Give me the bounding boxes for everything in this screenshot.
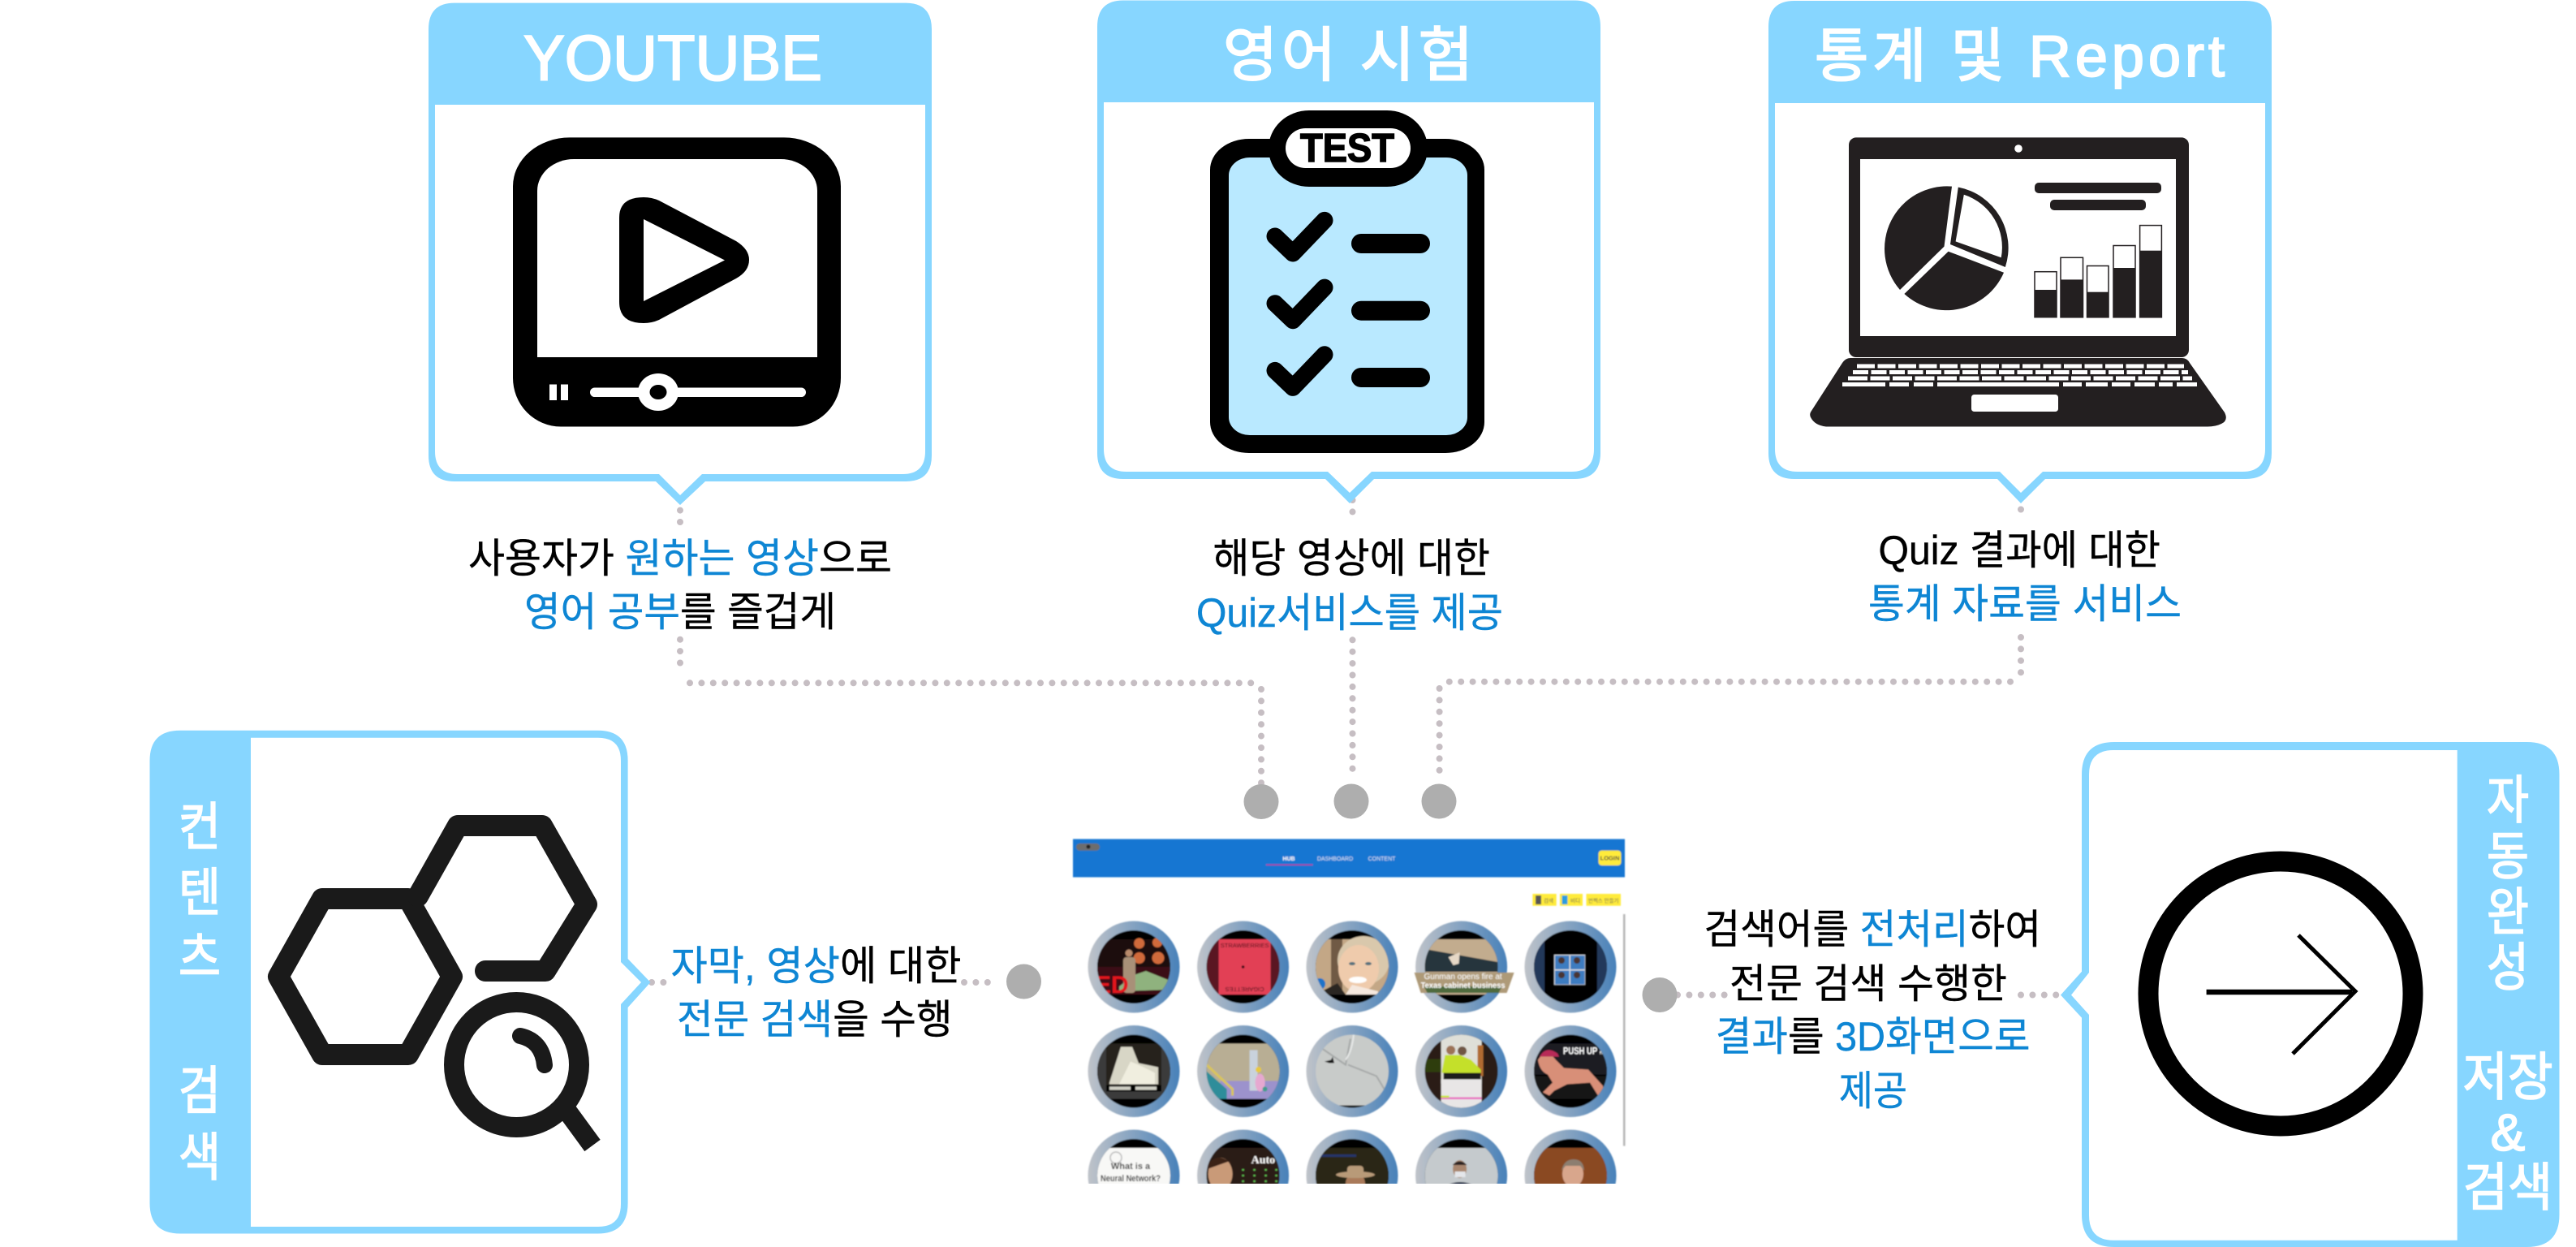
action buttons: 비디 bbox=[1570, 896, 1580, 904]
thumbnail: push up: PUSH UP # bbox=[1563, 1046, 1604, 1057]
sidebar heading: content search bbox=[179, 798, 221, 1187]
panel: content search bbox=[149, 731, 651, 1234]
navigation bar: DASHBOARD bbox=[1317, 857, 1353, 862]
text: content search description: 자막, 영상에 대한 bbox=[670, 943, 961, 989]
action buttons: 번쩍스 만들기 bbox=[1588, 896, 1619, 904]
connector: content search to screenshot bbox=[652, 979, 998, 986]
text: YouTube description bbox=[468, 536, 892, 635]
node: test connector dot bbox=[1334, 784, 1368, 818]
heading: YOUTUBE: YOUTUBE bbox=[523, 21, 822, 94]
connector: YouTube to screenshot bbox=[680, 511, 1261, 783]
thumbnail: TED talk bbox=[1088, 921, 1180, 1013]
icon: video player bbox=[513, 137, 841, 427]
sidebar heading: save and search: 저장 bbox=[2462, 1048, 2553, 1107]
text: test description: 해당 영상에 대한 bbox=[1213, 536, 1490, 581]
sidebar heading: save and search: 검색 bbox=[2463, 1159, 2552, 1217]
thumbnail: gunman news clip bbox=[1415, 921, 1514, 1013]
thumbnail: strawberries and cigarettes: STRAWBERRIES bbox=[1221, 942, 1269, 949]
sidebar heading: content search: 검 bbox=[179, 1062, 221, 1120]
thumbnail: cowboy bbox=[1305, 1128, 1399, 1184]
thumbnail: black and white film bbox=[1088, 1025, 1180, 1117]
video thumbnail grid bbox=[1088, 921, 1617, 1184]
thumbnail: man with mask bbox=[1415, 1128, 1508, 1184]
icon: test clipboard: TEST bbox=[1300, 127, 1394, 170]
action buttons: 검색 bbox=[1544, 896, 1553, 904]
panel: English test bbox=[1097, 0, 1600, 503]
thumbnail: gunman news clip: Texas cabinet business bbox=[1421, 982, 1506, 990]
text: test description bbox=[1196, 536, 1503, 636]
sidebar heading: save and search bbox=[2462, 1048, 2553, 1217]
sidebar heading: content search: 텐 bbox=[179, 864, 221, 922]
navigation bar bbox=[1073, 839, 1625, 877]
thumbnail: man with brown background bbox=[1524, 1128, 1617, 1184]
thumbnail: strawberries and cigarettes: CIGARETTES bbox=[1226, 986, 1264, 993]
node: search connector dot bbox=[1006, 964, 1041, 999]
text: statistics description: Quiz 결과에 대한 bbox=[1878, 528, 2160, 573]
node: statistics connector dot bbox=[1422, 784, 1456, 818]
navigation bar: CONTENT bbox=[1368, 857, 1396, 862]
sidebar heading: autocomplete: 자 bbox=[2487, 771, 2529, 830]
thumbnail: auto bbox=[1196, 1128, 1290, 1184]
thumbnail: neural network: Neural Network? bbox=[1101, 1174, 1161, 1184]
thumbnail: gunman news clip: Gunman opens fire at bbox=[1424, 973, 1502, 982]
icon: circled arrow bbox=[2148, 861, 2413, 1126]
connector: screenshot to autocomplete bbox=[1678, 992, 2061, 999]
scrollbar bbox=[1623, 914, 1625, 1146]
sidebar heading: autocomplete bbox=[2487, 771, 2529, 997]
text: result description bbox=[1704, 907, 2041, 1114]
text: content search description bbox=[670, 943, 961, 1042]
panel: statistics and report bbox=[1768, 1, 2272, 503]
thumbnail: smiling woman bbox=[1307, 921, 1398, 1013]
sidebar heading: content search: 츠 bbox=[179, 929, 221, 987]
text: result description: 검색어를 전처리하여 bbox=[1704, 907, 2041, 952]
navigation bar: LOGIN bbox=[1600, 854, 1619, 862]
icon: hexagons and magnifier bbox=[278, 826, 592, 1146]
thumbnail: grey close-up bbox=[1307, 1025, 1398, 1117]
panel: autocomplete, save and search bbox=[2061, 742, 2560, 1247]
text: YouTube description: 사용자가 원하는 영상으로 bbox=[468, 536, 892, 581]
navigation bar: HUB bbox=[1282, 857, 1295, 862]
heading: statistics and report: 통계 및 Report bbox=[1815, 24, 2225, 89]
text: result description: 결과를 3D화면으로 bbox=[1716, 1014, 2031, 1059]
thumbnail: neural network bbox=[1088, 1128, 1180, 1184]
connector: statistics to screenshot bbox=[1440, 510, 2021, 782]
sidebar heading: content search: 색 bbox=[179, 1128, 221, 1187]
text: test description: Quiz서비스를 제공 bbox=[1196, 590, 1503, 636]
thumbnail: strawberries and cigarettes bbox=[1197, 921, 1289, 1013]
action buttons bbox=[1532, 894, 1621, 906]
text: result description: 전문 검색 수행한 bbox=[1730, 961, 2007, 1007]
thumbnail: TED talk: ED bbox=[1095, 972, 1129, 999]
sidebar heading: autocomplete: 성 bbox=[2487, 938, 2529, 997]
icon: laptop with charts bbox=[1810, 137, 2226, 427]
heading: English test: 영어 시험 bbox=[1223, 23, 1473, 88]
thumbnail: cartoon interior bbox=[1197, 1025, 1289, 1117]
text: content search description: 전문 검색을 수행 bbox=[677, 997, 953, 1042]
panel: YOUTUBE bbox=[429, 3, 932, 505]
node: result connector dot bbox=[1643, 977, 1677, 1012]
panel: app screenshot bbox=[1073, 839, 1625, 1221]
sidebar heading: save and search: & bbox=[2491, 1103, 2525, 1162]
text: YouTube description: 영어 공부를 즐겁게 bbox=[524, 589, 836, 635]
sidebar heading: autocomplete: 동 bbox=[2487, 827, 2529, 886]
sidebar heading: autocomplete: 완 bbox=[2487, 883, 2529, 942]
text: statistics description: 통계 자료를 서비스 bbox=[1868, 581, 2182, 627]
connector: English test to screenshot bbox=[1349, 500, 1355, 780]
text: statistics description bbox=[1868, 528, 2182, 627]
thumbnail: two boys with table bbox=[1415, 1025, 1507, 1117]
screenshot bottom crop bbox=[1071, 1184, 1639, 1247]
text: result description: 제공 bbox=[1839, 1068, 1907, 1114]
thumbnail: neural network: What is a bbox=[1111, 1162, 1151, 1171]
thumbnail: push up bbox=[1524, 1025, 1617, 1117]
thumbnail: photo grid bbox=[1524, 921, 1617, 1013]
thumbnail: auto: Auto bbox=[1251, 1154, 1275, 1167]
node: YouTube connector dot bbox=[1243, 784, 1279, 819]
icon: test clipboard bbox=[1210, 110, 1484, 453]
sidebar heading: content search: 컨 bbox=[179, 798, 221, 857]
